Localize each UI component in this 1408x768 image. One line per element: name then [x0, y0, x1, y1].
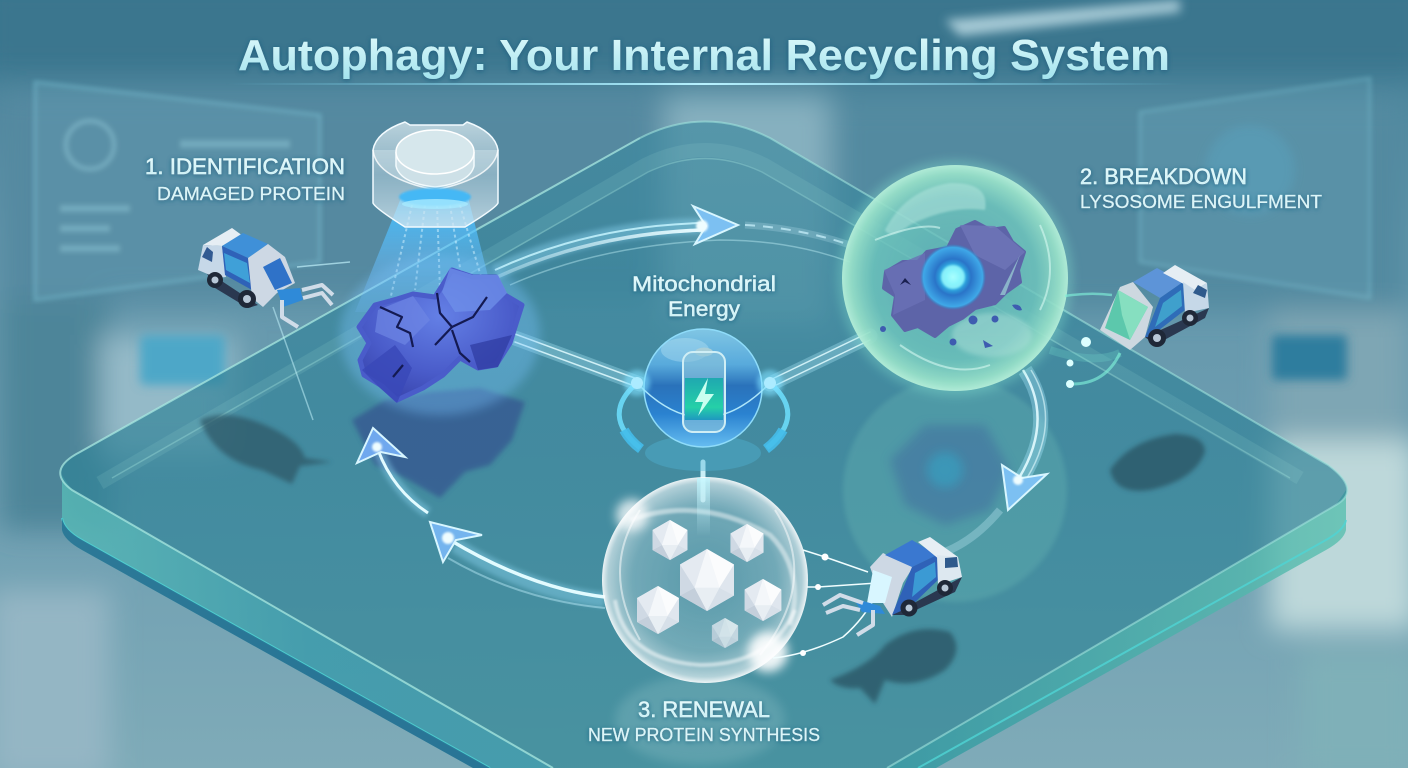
- hub sphere: [644, 329, 762, 447]
- hub dish: [645, 435, 761, 471]
- glass platform: [60, 122, 1347, 768]
- icon: recycling truck, right: [1100, 265, 1209, 350]
- connector bundles to energy hub: [515, 332, 870, 500]
- platform: front left face: [62, 475, 553, 768]
- scanner housing: [373, 122, 498, 227]
- scanner beam: [355, 193, 497, 312]
- truck shadow: left: [200, 415, 332, 484]
- icon: battery: [683, 348, 725, 432]
- label: mitochondrial energy: Mitochondrial: [632, 273, 776, 296]
- truck claw: [853, 598, 885, 614]
- hologram panel: left: [35, 82, 320, 300]
- label: step 3: [588, 697, 820, 745]
- hub ring arcs: [619, 383, 640, 448]
- label: step 2: 2. BREAKDOWN: [1080, 164, 1247, 189]
- digestive core: [920, 244, 986, 310]
- title: Autophagy: Your Internal Recycling System: [238, 31, 1170, 80]
- renewal sphere: [602, 477, 808, 683]
- label: step 3: 3. RENEWAL: [638, 697, 770, 722]
- damaged protein: [340, 255, 540, 415]
- protein fragment: [884, 222, 1024, 336]
- scanner device: [355, 122, 498, 312]
- lysosome sphere: [842, 165, 1068, 391]
- label: step 1: DAMAGED PROTEIN: [157, 184, 345, 204]
- arrow: identification to breakdown: [495, 206, 850, 285]
- label: step 2: LYSOSOME ENGULFMENT: [1080, 192, 1322, 212]
- truck shadow: right: [1110, 434, 1205, 491]
- label: step 1: 1. IDENTIFICATION: [145, 154, 345, 179]
- lysosome: [837, 160, 1073, 396]
- icon: recycling truck, left: [198, 228, 333, 327]
- sparkle trails: [273, 262, 1120, 658]
- energy hub: [619, 329, 788, 471]
- shadows and reflections on platform: [200, 378, 1205, 765]
- platform: front right face: [887, 490, 1346, 768]
- protein reflection: [352, 388, 525, 498]
- arrow: breakdown to renewal: [945, 370, 1047, 552]
- lysosome reflection: [843, 378, 1067, 602]
- sphere glints: [616, 499, 648, 531]
- label: mitochondrial energy: Energy: [668, 298, 741, 321]
- platform: top surface: [60, 122, 1347, 768]
- label: mitochondrial energy: [632, 273, 776, 321]
- label: step 3: NEW PROTEIN SYNTHESIS: [588, 725, 820, 745]
- icon: recycling truck, bottom: [823, 537, 962, 635]
- truck shadow: bottom: [830, 629, 956, 704]
- label: step 1: [145, 154, 345, 204]
- label: step 2: [1080, 164, 1322, 212]
- new protein polyhedra: [637, 520, 781, 648]
- truck claw: [277, 288, 303, 307]
- hologram panel: right: [1140, 78, 1370, 298]
- arrow: renewal to identification: [357, 428, 605, 608]
- title underline: [225, 83, 1185, 85]
